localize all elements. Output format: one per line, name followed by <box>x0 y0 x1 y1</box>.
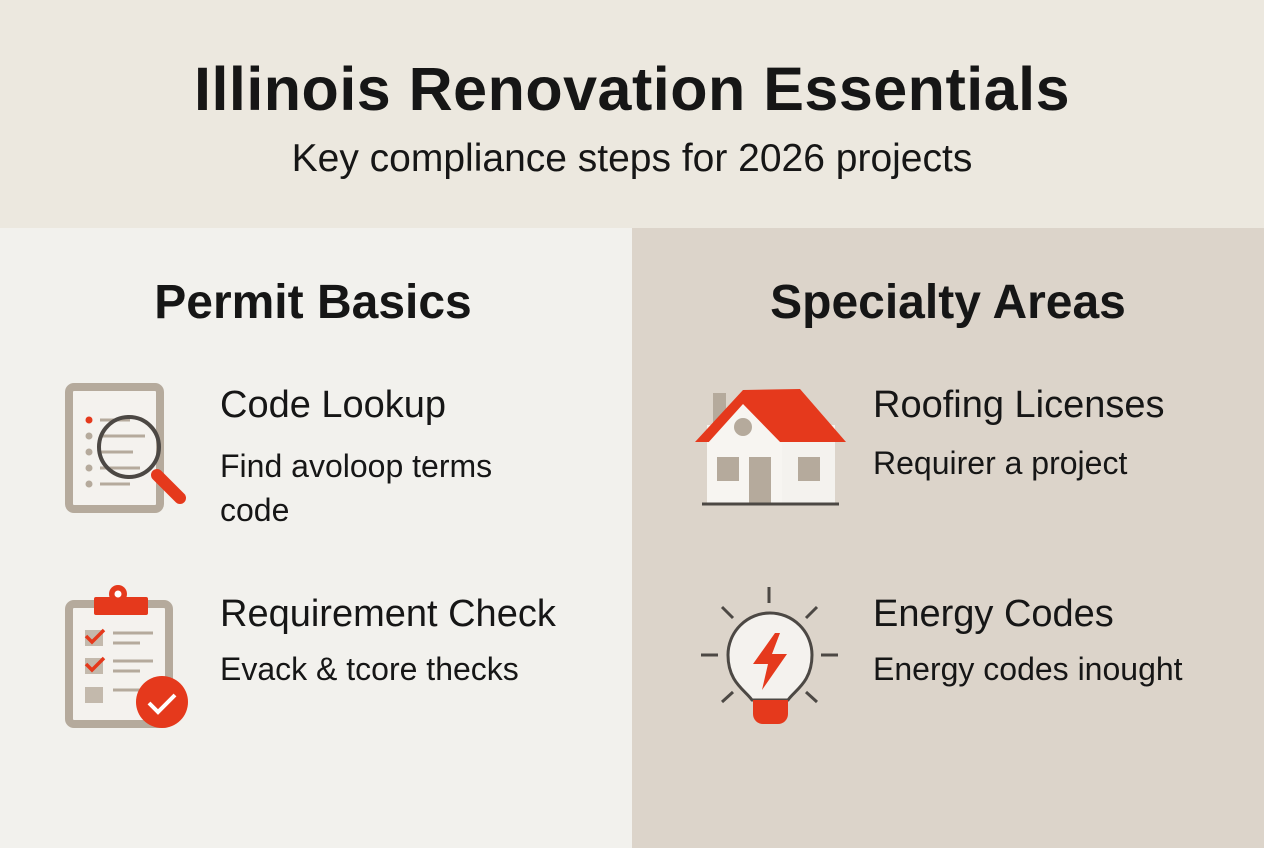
icon: house <box>695 389 846 504</box>
title: requirement check: Requirement Check <box>220 593 556 635</box>
item: requirement check <box>220 593 556 687</box>
item: energy codes <box>873 593 1183 687</box>
title: Illinois Renovation Essentials <box>194 55 1070 123</box>
item: roofing licenses <box>873 384 1165 481</box>
description: code lookup <box>220 448 492 528</box>
heading: permit basics: Permit Basics <box>154 276 472 329</box>
description: requirement check: Evack & tcore thecks <box>220 651 519 687</box>
icon: clipboard checklist <box>69 585 188 728</box>
title: energy codes: Energy Codes <box>873 593 1114 635</box>
subtitle: Key compliance steps for 2026 projects <box>292 137 972 180</box>
description: code lookup: code <box>220 492 289 528</box>
icon: light bulb <box>701 587 838 724</box>
heading: specialty areas: Specialty Areas <box>770 276 1126 329</box>
panel: specialty areas background <box>632 228 1264 848</box>
item: code lookup <box>220 384 492 528</box>
header band <box>0 0 1264 228</box>
icon: document with magnifier <box>69 387 180 509</box>
description: code lookup: Find avoloop terms <box>220 448 492 484</box>
title: roofing licenses: Roofing Licenses <box>873 384 1165 426</box>
description: roofing licenses: Requirer a project <box>873 445 1127 481</box>
panel: permit basics background <box>0 228 632 848</box>
description: energy codes: Energy codes inought <box>873 651 1183 687</box>
title: code lookup: Code Lookup <box>220 384 446 426</box>
